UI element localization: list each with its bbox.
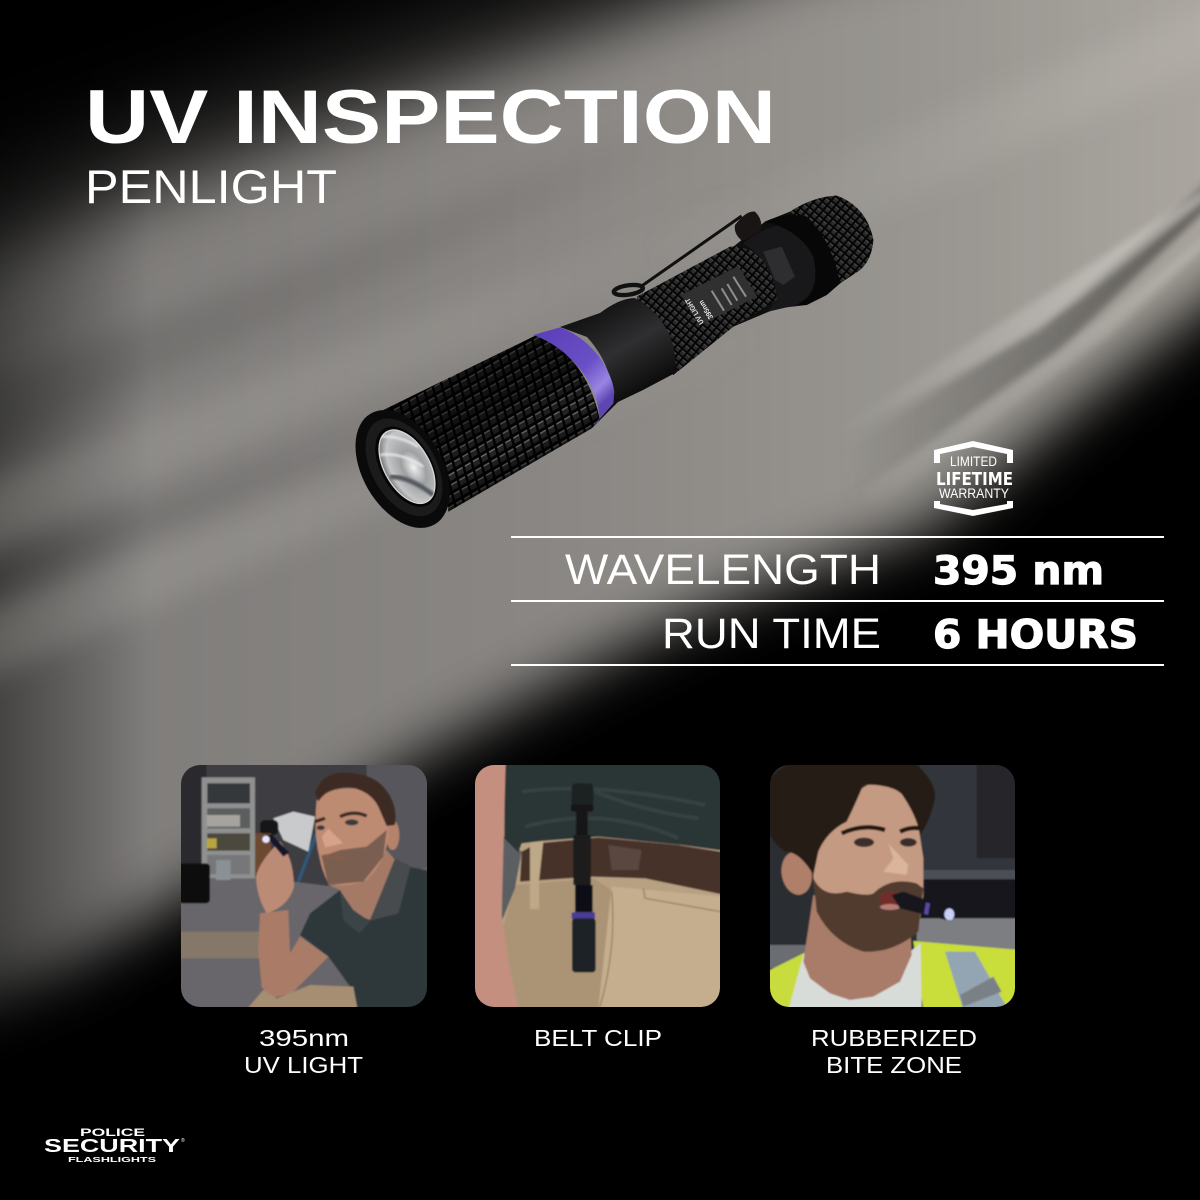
trouser panels: [502, 878, 612, 1008]
bitten penlight: [892, 892, 954, 921]
purple ring: [533, 327, 614, 428]
man's shirt: [300, 866, 427, 1007]
caption: rubberized bite zone: [811, 1025, 977, 1078]
caption: 395nm UV light: [244, 1025, 363, 1078]
run time value: 6 HOURS: [933, 613, 1138, 658]
dark shirt: [504, 762, 725, 852]
hair: [767, 762, 935, 875]
man's ear: [386, 820, 399, 850]
product label: UV LIGHT: [683, 296, 706, 326]
caption: 395nm UV light: UV LIGHT: [244, 1052, 363, 1078]
white t-shirt: [788, 943, 922, 1010]
warranty badge: WARRANTY: [939, 486, 1009, 501]
slim knurled barrel: [637, 247, 777, 375]
product label: [681, 266, 757, 326]
specs table: [511, 536, 1164, 666]
shirt collar: [370, 858, 411, 921]
front bezel: [356, 410, 450, 528]
neck highlight: [763, 247, 795, 285]
brand logo: POLICE: [80, 1127, 145, 1139]
man's neck: [328, 850, 395, 920]
warranty badge: [934, 441, 1013, 516]
caption: rubberized bite zone: RUBBERIZED: [811, 1025, 977, 1051]
man's hand: [256, 842, 294, 913]
clipped penlight: [571, 783, 596, 972]
caption: belt clip: BELT CLIP: [534, 1025, 662, 1051]
storage shelves: [202, 777, 255, 878]
beard: [813, 878, 923, 952]
run time label: RUN TIME: [662, 610, 881, 658]
ear: [780, 852, 813, 896]
brand logo: SECURITY: [44, 1136, 180, 1156]
product label: 395nm: [696, 298, 715, 321]
stubble: [322, 830, 387, 885]
leather belt: [520, 837, 725, 895]
neck: [743, 223, 822, 312]
brand logo: [44, 1127, 185, 1164]
warranty badge: LIFETIME: [936, 469, 1013, 490]
subtitle: PENLIGHT: [85, 160, 337, 213]
neck: [803, 895, 912, 1000]
tail knurled cap: [790, 196, 873, 283]
reflector lens: [378, 429, 436, 504]
man's face: [315, 788, 388, 885]
front half of flashlight: [356, 328, 614, 528]
wavelength label: WAVELENGTH: [565, 546, 881, 594]
photo: man biting penlight: [767, 762, 1020, 1010]
face: [812, 784, 925, 925]
man's arm: [258, 910, 328, 998]
belt loop: [530, 841, 543, 909]
rubber ring: [765, 215, 840, 305]
man's trousers: [248, 984, 358, 1007]
pocket clip: [613, 211, 761, 297]
flashlight product: [336, 196, 873, 544]
hi-vis vest: [767, 941, 1020, 1010]
knurl shading: [383, 335, 600, 512]
skin at left edge: [475, 765, 518, 1007]
brand logo: FLASHLIGHTS: [68, 1155, 156, 1164]
photo: man holding UV light: [177, 760, 433, 1013]
man's hair: [315, 773, 396, 826]
photo: belt clip: [472, 762, 725, 1010]
wavelength value: 395 nm: [933, 549, 1104, 594]
gap behind arm: [502, 835, 522, 922]
brand logo: ®: [181, 1137, 185, 1144]
facial features: [842, 827, 920, 833]
rear half of flashlight: [613, 196, 873, 375]
caption: 395nm UV light: 395nm: [259, 1025, 349, 1051]
penlight in hand: [265, 834, 289, 857]
knurled main body: [383, 335, 600, 512]
caption: rubberized bite zone: BITE ZONE: [826, 1052, 962, 1078]
warranty badge: LIMITED: [950, 454, 997, 469]
mid tube collar: [560, 298, 677, 428]
rear silhouette: [640, 196, 873, 375]
title: UV INSPECTION: [85, 75, 776, 160]
